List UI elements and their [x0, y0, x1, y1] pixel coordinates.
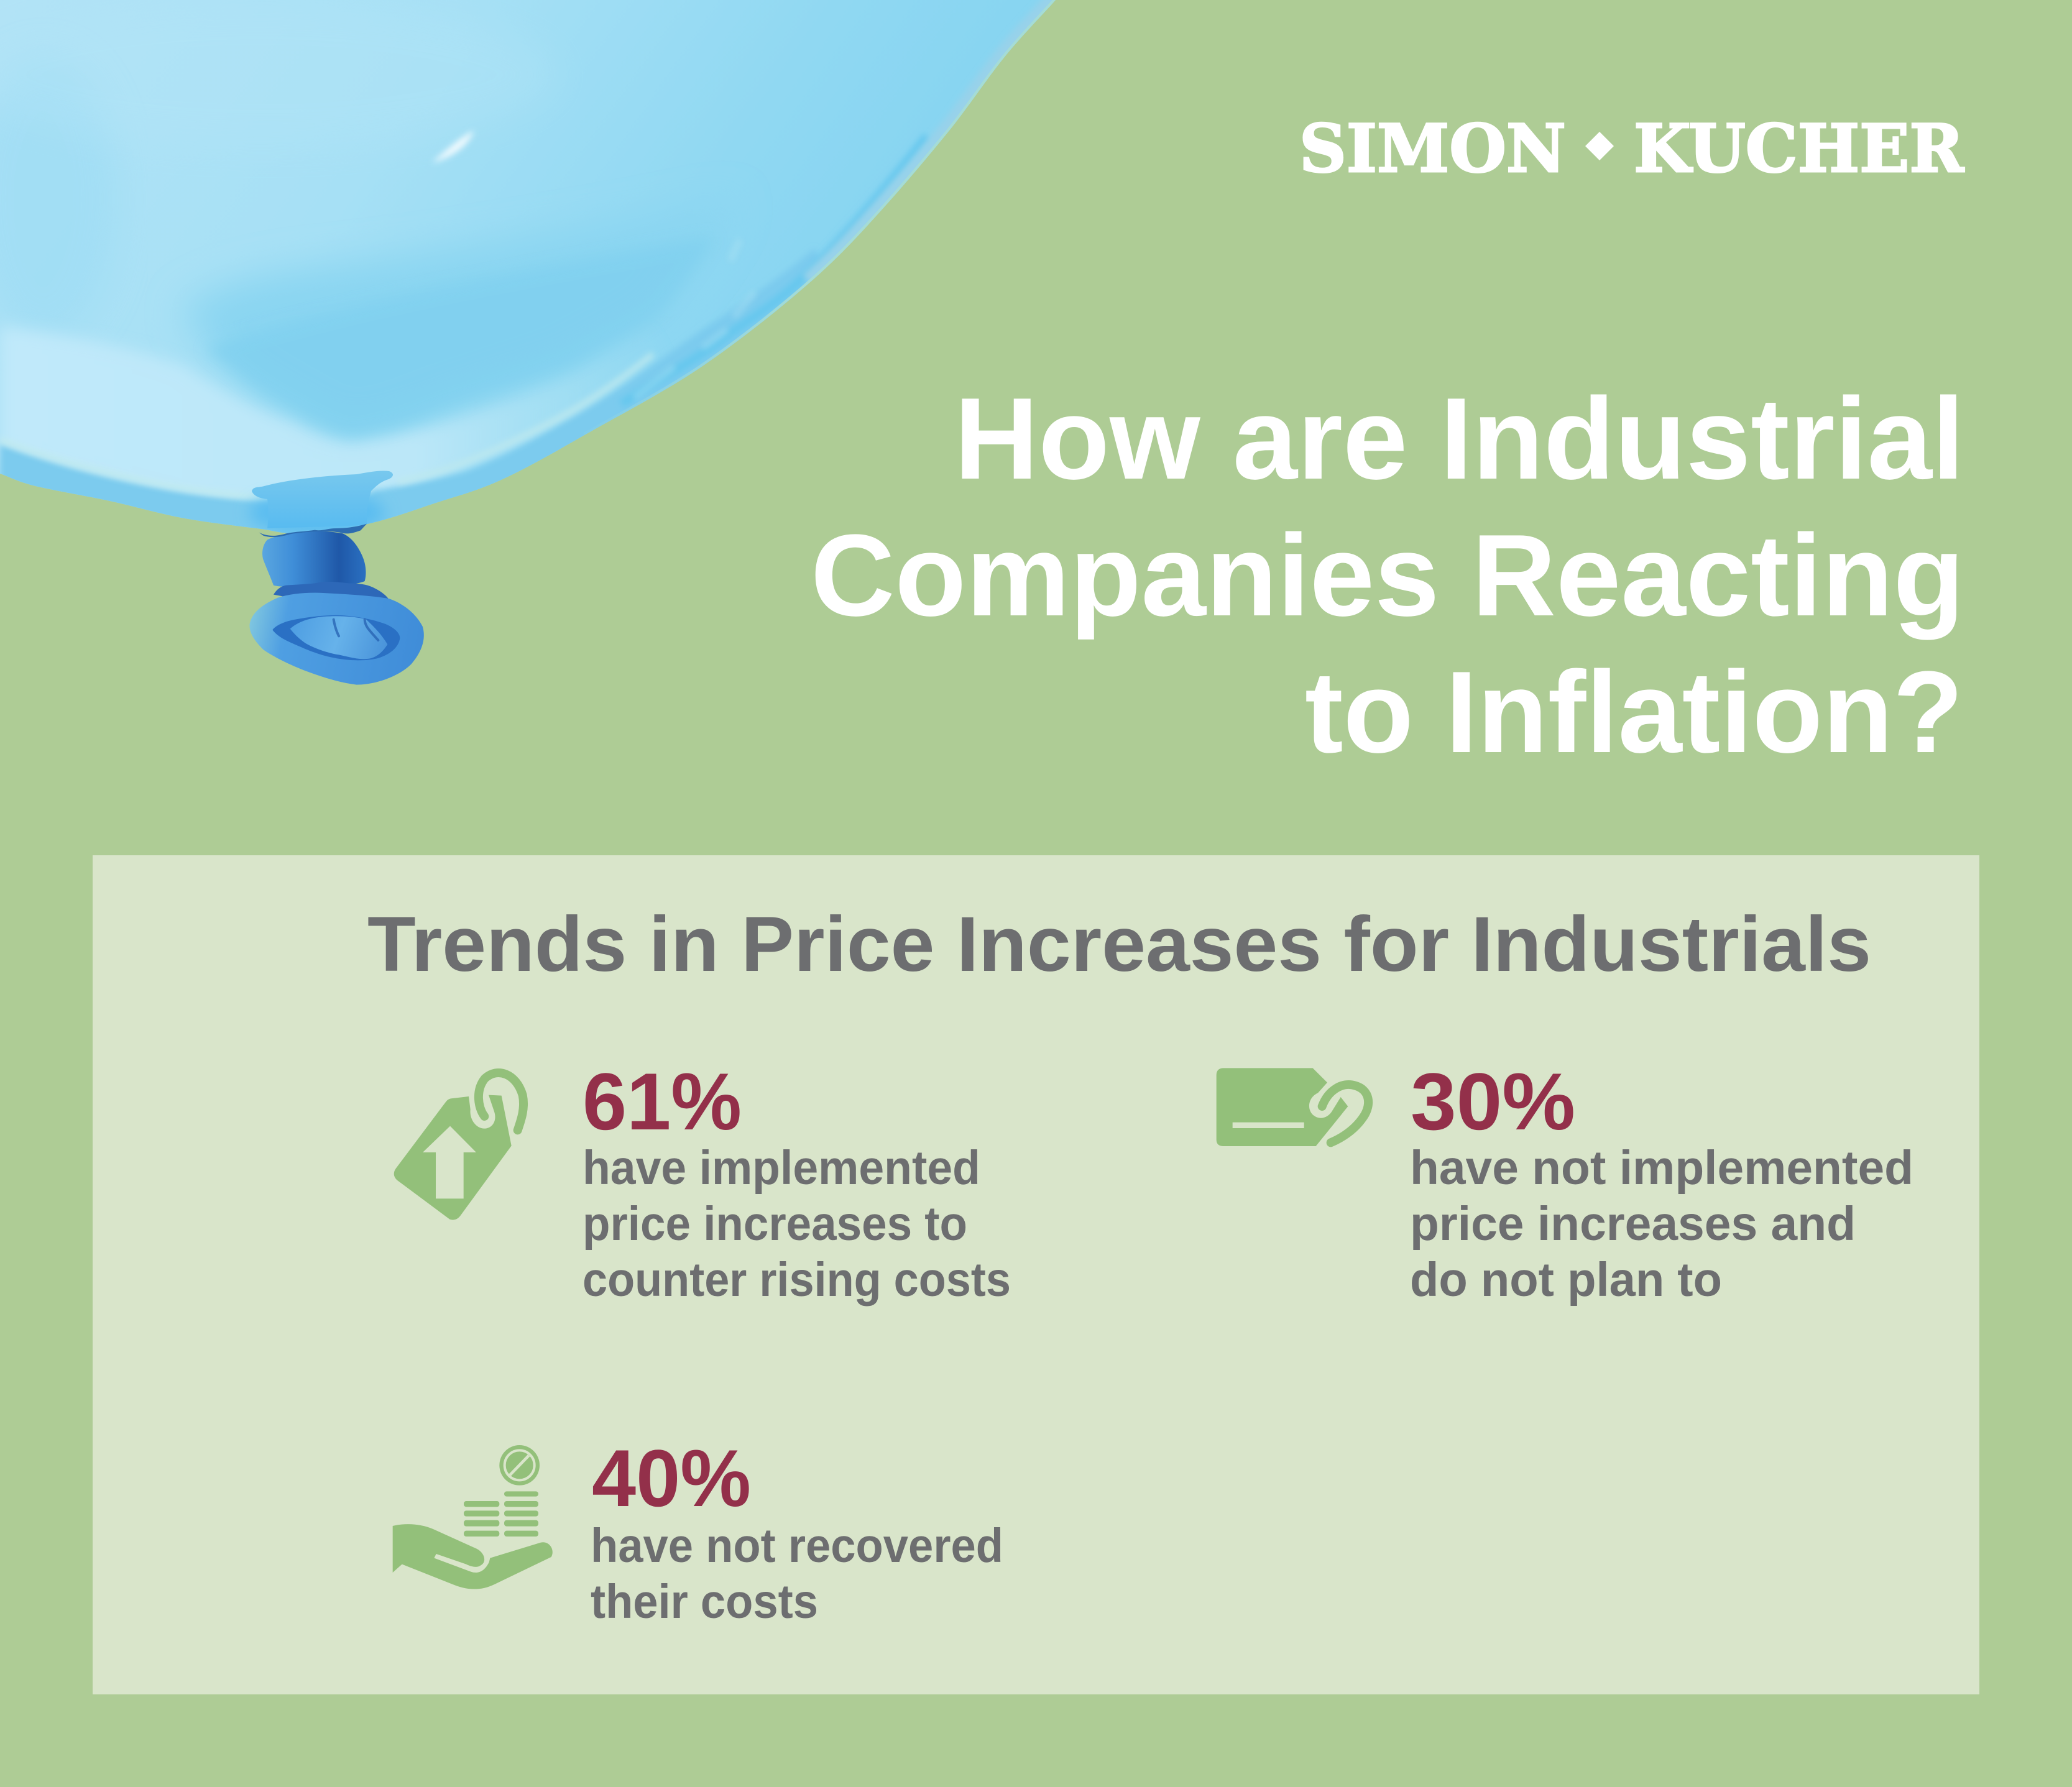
mouth rim: [249, 593, 424, 685]
stat: 30%: do not plan to: [1410, 1253, 1722, 1307]
mouth folds: [290, 616, 387, 659]
icon: hand holding coins: [393, 1445, 553, 1589]
stat: 40%: [591, 1433, 1003, 1629]
bottom rim band: [0, 249, 833, 547]
neck: [262, 531, 366, 587]
logo: Simon Kucher: [1299, 109, 1964, 187]
stat: 61%: have implemented: [582, 1141, 980, 1195]
left soft shadow: [0, 91, 104, 322]
title: How are Industrial: [954, 374, 1964, 503]
title: to Inflation?: [1305, 647, 1963, 777]
top highlight: [0, 0, 559, 149]
outer edge band: [809, 0, 1056, 283]
lower pale reflection: [0, 324, 614, 496]
dark shade around tie: [249, 491, 385, 535]
logo: Simon Kucher: SIMON: [1299, 109, 1566, 187]
balloon photo: [0, 0, 1069, 685]
panel: trends in price increases: [93, 855, 1979, 1694]
title: [811, 374, 1964, 777]
balloon knot: [249, 524, 424, 685]
inner streak along right edge: [622, 136, 927, 404]
stat: 30%: 30%: [1411, 1056, 1575, 1147]
stat: 40%: their costs: [591, 1575, 818, 1629]
glass scratches: [634, 239, 755, 398]
icon: price tag with up arrow: [394, 1073, 523, 1220]
panel heading: Trends in Price Increases for Industrials: [367, 901, 1871, 988]
folded collar: [274, 582, 389, 601]
stat: 40%: 40%: [592, 1433, 751, 1523]
stat: 30%: price increases and: [1410, 1197, 1856, 1251]
stat: 61%: [582, 1056, 1011, 1307]
balloon body: [0, 0, 1069, 547]
darker central patch, sharp lower edge: [205, 236, 715, 435]
stat: 30%: have not implemented: [1410, 1141, 1913, 1195]
mouth interior: [272, 615, 400, 660]
stat: 40%: have not recovered: [591, 1519, 1003, 1573]
pale line above rim: [0, 440, 371, 497]
stat: 61%: price increases to: [582, 1197, 967, 1251]
stat: 30%: [1410, 1056, 1913, 1307]
icon: price tag flat: [1217, 1068, 1368, 1146]
darker central patch, soft top: [183, 237, 623, 404]
tie patch: [252, 471, 393, 528]
stat: 61%: counter rising costs: [582, 1253, 1011, 1307]
tie crease: [259, 524, 367, 537]
stat: 61%: 61%: [582, 1056, 742, 1147]
specular highlight: [432, 131, 474, 163]
title: Companies Reacting: [811, 510, 1964, 640]
logo: Simon Kucher: KUCHER: [1634, 109, 1964, 187]
